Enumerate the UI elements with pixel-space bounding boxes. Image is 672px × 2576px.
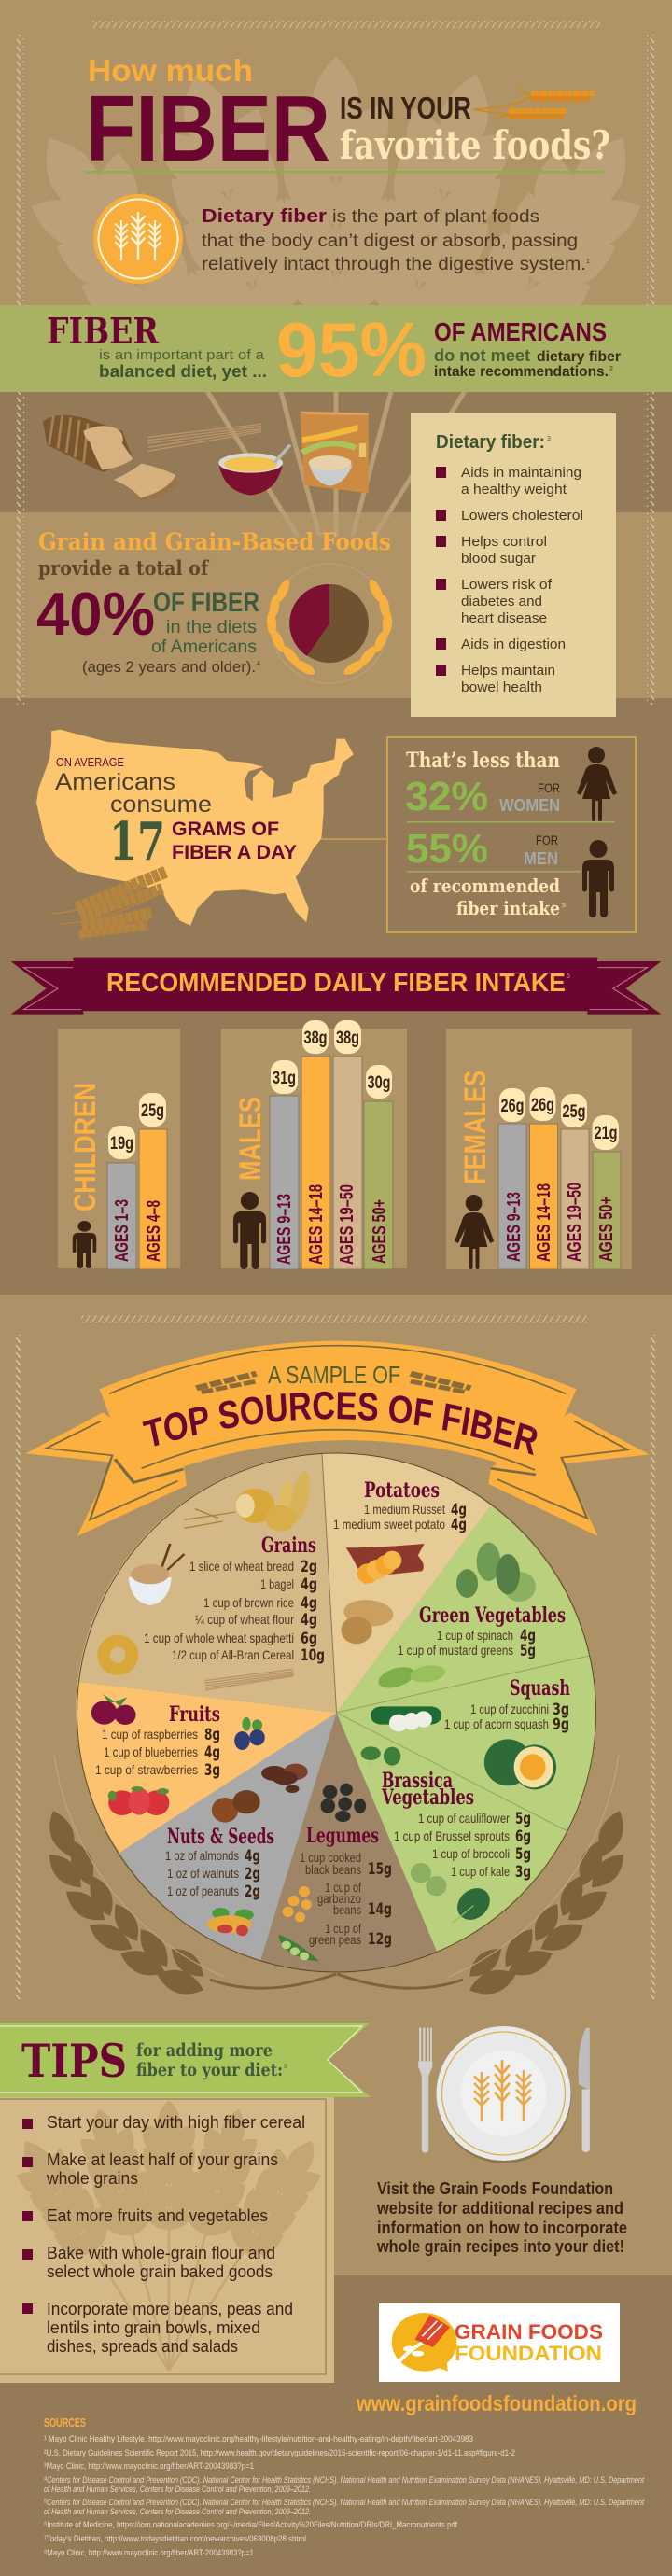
chart: females bbox=[446, 1029, 632, 1269]
icon: plate bbox=[437, 2026, 571, 2163]
icon: brussels sprouts bbox=[411, 1863, 446, 1896]
bar: ages 4-8: 25g bbox=[141, 1101, 164, 1121]
banner: a sample of top sources of fiber: 7 bbox=[531, 1428, 535, 1435]
tips text: Incorporate more beans, peas and bbox=[47, 2300, 293, 2318]
green vegetables text: Green Vegetables bbox=[419, 1603, 566, 1628]
banner text: top sources of fiber: TOP SOURCES OF FIBER bbox=[142, 1391, 538, 1456]
slice: potatoes: 1 medium sweet potato bbox=[333, 1517, 445, 1532]
icon: acorn squash bbox=[484, 1739, 556, 1789]
potatoes text: Potatoes bbox=[364, 1478, 440, 1503]
heading: tips: TIPS bbox=[21, 2034, 127, 2088]
icon: zucchini bbox=[371, 1706, 441, 1731]
flag: tips heading: fiber to your diet: bbox=[136, 2060, 283, 2080]
band text: balanced diet: balanced diet, yet ... bbox=[99, 362, 267, 381]
sources list: of Health and Human Services, Centers for Disease Control and Prevention, 2009–2012. bbox=[44, 2485, 311, 2495]
bar: ages 19-50: AGES 19–50 bbox=[565, 1183, 585, 1262]
slice: legumes: 1 cup cooked bbox=[300, 1850, 361, 1865]
icon: kale bbox=[452, 1885, 496, 1924]
bar: ages 1-3: 19g bbox=[110, 1134, 133, 1154]
stat: 17 grams: 17 bbox=[109, 811, 165, 873]
icon: black beans bbox=[320, 1784, 366, 1822]
title line: how much: How much bbox=[88, 53, 253, 88]
icon: peanuts bbox=[207, 1908, 254, 1936]
icon: leafy greens bbox=[456, 1543, 536, 1602]
icon: man bbox=[582, 840, 614, 917]
side decoration: sources section bbox=[14, 1315, 658, 1999]
ribbon: recommended daily fiber intake bbox=[10, 958, 662, 1015]
bar: ages 50+: AGES 50+ bbox=[370, 1199, 390, 1264]
slice: grains: 4g bbox=[301, 1611, 317, 1630]
panel: less than recommended: WOMEN bbox=[499, 795, 560, 815]
slice: legumes: black beans bbox=[305, 1862, 361, 1877]
slice: nuts and seeds: 1 oz of peanuts bbox=[167, 1883, 239, 1898]
map text: ON AVERAGE bbox=[56, 755, 124, 769]
background wheat watermark bbox=[0, 56, 672, 634]
title line: favorite foods: favorite foods? bbox=[340, 122, 610, 168]
band heading: fiber: FIBER bbox=[47, 310, 159, 352]
flag: tips heading bbox=[0, 2023, 371, 2097]
slice: potatoes: 4g bbox=[451, 1516, 467, 1534]
slice: fruits: 8g bbox=[204, 1726, 220, 1744]
slice: squash: 9g bbox=[553, 1715, 569, 1734]
benefit bullets bbox=[436, 467, 446, 676]
icon: chickpeas bbox=[283, 1886, 312, 1922]
band heading: of americans: OF AMERICANS bbox=[434, 317, 607, 346]
slice: grains: 1 cup of whole wheat spaghetti bbox=[144, 1631, 294, 1645]
text block: grain foods 40 percent: (ages 2 years and older). bbox=[82, 658, 256, 676]
brassica text: Brassica bbox=[382, 1769, 453, 1793]
slice: grains: 1 bagel bbox=[260, 1576, 294, 1591]
slice: squash: 3g bbox=[553, 1701, 569, 1719]
slice: fruits: 4g bbox=[204, 1743, 220, 1762]
icon: woman bbox=[577, 747, 617, 821]
legumes text: Legumes bbox=[306, 1824, 379, 1848]
sources list: ⁸Mayo Clinic, http://www.mayoclinic.org/fiber/ART-20043983?p=1 bbox=[44, 2548, 254, 2558]
text block: dietary fiber definition: is the part of plant foods bbox=[332, 207, 539, 227]
slice: brassica vegetables: 1 cup of Brussel sprouts bbox=[394, 1828, 510, 1843]
tips text: Make at least half of your grains bbox=[47, 2150, 278, 2169]
slice: grains: 2g bbox=[301, 1558, 317, 1576]
illustration: plate and cutlery bbox=[418, 2026, 590, 2163]
pie outline bbox=[77, 1453, 595, 1972]
bar: ages 50+ bbox=[364, 1065, 393, 1269]
slice: green vegetables: 4g bbox=[520, 1627, 536, 1645]
bar: ages 9-13: 31g bbox=[273, 1069, 296, 1088]
logo mark bbox=[392, 2313, 457, 2372]
benefit list text: Lowers risk of bbox=[461, 577, 553, 593]
heading: grain foods: Grain and Grain-Based Foods bbox=[38, 528, 391, 555]
icon: wheat badge bbox=[93, 194, 183, 284]
connector line bbox=[321, 838, 387, 840]
slice: grains: 4g bbox=[301, 1594, 317, 1613]
bar: ages 4-8 bbox=[139, 1093, 167, 1269]
panel: 95 percent band: intake recommendations. bbox=[434, 364, 609, 380]
bar: ages 14-18 bbox=[301, 1020, 330, 1269]
bar: ages 9-13: 26g bbox=[500, 1097, 525, 1116]
panel: less than recommended: MEN bbox=[524, 848, 558, 868]
sources list: ¹ Mayo Clinic Healthy Lifestyle. http://www.mayoclinic.org/healthy-lifestyle/nutrition-and-healthy-eating/in-depth/fiber/art-20043983 bbox=[44, 2434, 473, 2444]
ribbon: recommended daily fiber intake: 6 bbox=[567, 973, 570, 980]
slice: legumes: 15g bbox=[368, 1860, 392, 1879]
logo: grain foods foundation: FOUNDATION bbox=[455, 2342, 602, 2365]
slice: green vegetables bbox=[336, 1505, 595, 1952]
bar: ages 14-18 bbox=[530, 1087, 558, 1269]
slice: brassica vegetables: 1 cup of cauliflower bbox=[418, 1811, 510, 1826]
chart: 40 percent pie with wreath bbox=[266, 564, 393, 683]
slice: grains: 1/2 cup of All-Bran Cereal bbox=[172, 1647, 294, 1662]
sources list: ³Mayo Clinic, http://www.mayoclinic.org/fiber/ART-20043983?p=1 bbox=[44, 2461, 254, 2471]
tips text: whole grains bbox=[46, 2169, 138, 2188]
food illustrations: bread pasta cereal bbox=[43, 412, 369, 501]
label: males: MALES bbox=[233, 1097, 267, 1181]
slice: grains: 10g bbox=[301, 1646, 325, 1665]
slice: legumes: 1 cup of bbox=[325, 1921, 361, 1936]
slice: potatoes bbox=[322, 1453, 491, 1713]
tips text: Eat more fruits and vegetables bbox=[47, 2206, 268, 2225]
slice: grains: 6g bbox=[301, 1630, 317, 1648]
stat: 95 percent: 95% bbox=[276, 306, 427, 393]
slice: legumes bbox=[260, 1713, 437, 1972]
slice: nuts and seeds: 1 oz of almonds bbox=[165, 1848, 239, 1863]
bar: ages 4-8: AGES 4–8 bbox=[144, 1200, 164, 1262]
chart: top sources pie bbox=[76, 1453, 596, 1972]
stat: 40 percent: 40% bbox=[36, 580, 155, 648]
grains text: Grains bbox=[261, 1533, 316, 1558]
chart: children bbox=[58, 1029, 180, 1269]
icon: bowl bbox=[218, 445, 290, 496]
slice: fruits: 3g bbox=[204, 1761, 220, 1780]
bar: ages 19-50: 38g bbox=[336, 1029, 359, 1048]
slice: squash: 1 cup of zucchini bbox=[470, 1701, 549, 1716]
bar: ages 14-18: AGES 14–18 bbox=[534, 1183, 554, 1262]
slice: legumes: garbanzo bbox=[317, 1891, 361, 1906]
icon: raspberries bbox=[91, 1694, 136, 1725]
wheat wreath behind plate chart bbox=[42, 1755, 631, 2001]
label: children: CHILDREN bbox=[68, 1083, 102, 1211]
label: of fiber: OF FIBER bbox=[153, 587, 259, 618]
stat: men: 55% bbox=[406, 826, 488, 872]
icon: wheat bundle bbox=[51, 872, 166, 936]
icon: man bbox=[233, 1192, 266, 1269]
tips text: select whole grain baked goods bbox=[47, 2262, 273, 2281]
benefit list text: a healthy weight bbox=[461, 482, 567, 497]
text block: dietary fiber definition: that the body can’t digest or absorb, passing bbox=[202, 231, 578, 251]
slice: nuts and seeds: 2g bbox=[245, 1883, 260, 1901]
bar: ages 19-50: 25g bbox=[562, 1102, 586, 1122]
bar: ages 14-18: 26g bbox=[531, 1096, 554, 1115]
icon: bread loaf bbox=[43, 415, 176, 501]
slice: grains: ¼ cup of wheat flour bbox=[195, 1612, 294, 1627]
slice: brassica vegetables: 3g bbox=[515, 1863, 531, 1882]
panel: less than recommended: fiber intake bbox=[456, 897, 560, 919]
band text: important part: is an important part of a bbox=[99, 347, 265, 363]
tips text bbox=[46, 2113, 305, 2356]
bar: ages 19-50: AGES 19–50 bbox=[337, 1184, 357, 1265]
map: united states with consumption stat: FIBER A DAY bbox=[172, 842, 297, 863]
benefits heading: Dietary fiber: bbox=[436, 432, 545, 453]
bar: ages 50+: AGES 50+ bbox=[596, 1197, 617, 1262]
sources list bbox=[44, 2434, 644, 2558]
icon: knife bbox=[579, 2028, 590, 2152]
tip bullets bbox=[22, 2119, 33, 2314]
icon: title wheat bbox=[473, 87, 595, 119]
slice: nuts and seeds: 4g bbox=[245, 1847, 260, 1866]
icon: strawberries bbox=[108, 1786, 169, 1815]
band text: do not meet: do not meet bbox=[434, 346, 530, 365]
panel watermark wheat bbox=[0, 2100, 342, 2389]
text block: grain foods 40 percent: of Americans bbox=[151, 637, 257, 657]
sources heading: SOURCES bbox=[44, 2415, 86, 2429]
sources bbox=[44, 2415, 644, 2558]
text block: visit foundation: Visit the Grain Foods Foundation bbox=[377, 2179, 613, 2198]
bar: ages 50+: 30g bbox=[368, 1073, 390, 1093]
panel: 95 percent band bbox=[0, 305, 672, 393]
flag: tips heading: 8 bbox=[284, 2064, 287, 2070]
slice: legumes: 14g bbox=[368, 1900, 392, 1919]
sources list: ²U.S. Dietary Guidelines Scientific Report 2015, http://www.health.gov/dietaryguidelines/2015-scientific-report/06-chapter-1/d1-11.asp#figure-d1-2 bbox=[44, 2448, 515, 2458]
panel footer text: of recommended bbox=[410, 875, 560, 897]
bar: ages 9-13 bbox=[498, 1088, 526, 1269]
chart: males bbox=[221, 1020, 407, 1269]
icon: pecans bbox=[261, 1764, 308, 1793]
tips text: dishes, spreads and salads bbox=[47, 2337, 238, 2356]
text block: dietary fiber definition: relatively intact through the digestive system. bbox=[202, 255, 586, 274]
text block: dietary fiber definition: 1 bbox=[586, 259, 590, 265]
panel: dietary fiber benefits: 3 bbox=[547, 436, 551, 442]
benefit list text: diabetes and bbox=[461, 594, 542, 609]
text block: grain foods 40 percent: in the diets bbox=[166, 618, 257, 637]
sources list: of Health and Human Services, Centers for Disease Control and Prevention, 2009–2012. bbox=[44, 2507, 311, 2517]
benefit list text: blood sugar bbox=[461, 551, 536, 567]
sources list: ⁶Institute of Medicine, https://iom.nationalacademies.org/~/media/Files/Activity%20Files/Nutrition/DRIs/DRI_Macronutrients.pdf bbox=[44, 2520, 457, 2530]
panel: less than recommended: 5 bbox=[562, 903, 566, 909]
slice: brassica vegetables: 1 cup of kale bbox=[451, 1864, 510, 1879]
benefit list text: Helps control bbox=[461, 534, 547, 550]
map: united states with consumption stat: Americans bbox=[55, 769, 175, 795]
map: united states with consumption stat bbox=[36, 730, 354, 936]
benefit list text: Lowers cholesterol bbox=[461, 508, 583, 524]
panel: less than recommended: FOR bbox=[538, 780, 560, 795]
slice: grains: 4g bbox=[301, 1575, 317, 1594]
slice: brassica vegetables bbox=[336, 1713, 567, 1924]
slice: green vegetables: 1 cup of mustard greens bbox=[398, 1643, 513, 1658]
slice: brassica vegetables: 1 cup of broccoli bbox=[432, 1846, 510, 1861]
text block: grain foods 40 percent bbox=[36, 528, 391, 676]
slice: grains: 1 slice of wheat bread bbox=[189, 1559, 294, 1574]
bar: ages 14-18: AGES 14–18 bbox=[306, 1184, 327, 1265]
icon: pea pod bbox=[278, 1935, 319, 1962]
icon: lettuce leaves bbox=[373, 1662, 448, 1692]
bar: ages 9-13 bbox=[270, 1060, 299, 1269]
tips text: Start your day with high fiber cereal bbox=[47, 2113, 305, 2132]
slice: squash bbox=[336, 1655, 594, 1789]
slice: nuts and seeds bbox=[119, 1713, 336, 1961]
logo: grain foods foundation bbox=[379, 2303, 620, 2382]
icon: child bbox=[73, 1221, 96, 1268]
slice: brassica vegetables: Vegetables bbox=[381, 1785, 474, 1810]
tips text: lentils into grain bowls, mixed bbox=[47, 2318, 260, 2337]
icon: bread bbox=[184, 1470, 314, 1532]
benefit list text: Aids in digestion bbox=[461, 637, 566, 652]
slice: nuts and seeds: 1 oz of walnuts bbox=[167, 1866, 239, 1881]
bar: ages 14-18: 38g bbox=[304, 1029, 327, 1048]
bar: ages 19-50 bbox=[561, 1094, 589, 1269]
banner text: a sample of: A SAMPLE OF bbox=[268, 1361, 400, 1389]
benefit list text bbox=[461, 465, 583, 695]
slice: nuts and seeds: 2g bbox=[245, 1865, 260, 1883]
website url: www.grainfoodsfoundation.org bbox=[356, 2391, 637, 2415]
slice: legumes: 12g bbox=[368, 1930, 392, 1949]
slice: potatoes: 1 medium Russet bbox=[364, 1502, 445, 1517]
stat: women: 32% bbox=[405, 774, 488, 819]
title line: is in your: IS IN YOUR bbox=[340, 91, 471, 125]
slice: legumes: green peas bbox=[309, 1932, 361, 1947]
tips text: Bake with whole-grain flour and bbox=[47, 2244, 275, 2262]
icon: banner wheat right bbox=[411, 1374, 470, 1393]
nuts text: Nuts & Seeds bbox=[167, 1825, 274, 1849]
slice: fruits: 1 cup of raspberries bbox=[102, 1727, 198, 1742]
icon: spaghetti bbox=[204, 1669, 294, 1690]
map: united states with consumption stat: consume bbox=[110, 791, 212, 818]
slice: fruits: 1 cup of strawberries bbox=[95, 1762, 198, 1777]
slice: brassica vegetables: 5g bbox=[515, 1845, 531, 1864]
benefit list text: bowel health bbox=[461, 679, 542, 695]
icon: rice bowl bbox=[129, 1544, 184, 1605]
panel: 95 percent band: 2 bbox=[609, 366, 613, 372]
label: females: FEMALES bbox=[458, 1071, 492, 1184]
panel: less than recommended: FOR bbox=[536, 833, 558, 847]
logo wordmark: GRAIN FOODS bbox=[455, 2320, 603, 2344]
text block: dietary fiber definition bbox=[202, 206, 590, 274]
squash text: Squash bbox=[510, 1676, 570, 1701]
fruits text: Fruits bbox=[169, 1702, 220, 1727]
bar: ages 50+: 21g bbox=[594, 1124, 618, 1143]
slice: brassica vegetables: 6g bbox=[515, 1827, 531, 1846]
slice: green vegetables: 5g bbox=[520, 1642, 536, 1660]
panel: tips list bbox=[0, 2099, 342, 2389]
benefit list text: heart disease bbox=[461, 610, 547, 626]
panel: dietary fiber benefits bbox=[411, 413, 616, 717]
bar: ages 1-3: AGES 1–3 bbox=[112, 1199, 133, 1262]
icon: blueberries bbox=[234, 1717, 265, 1750]
slice: fruits: 1 cup of blueberries bbox=[104, 1744, 198, 1759]
sources list: ⁷Today’s Dietitian, http://www.todaysdietitian.com/newarchives/063008p28.shtml bbox=[44, 2534, 306, 2544]
icon: spaghetti bbox=[147, 424, 261, 451]
map: united states with consumption stat: GRAMS OF bbox=[172, 819, 279, 840]
bar: ages 50+ bbox=[592, 1115, 621, 1269]
bar: ages 9-13: AGES 9–13 bbox=[274, 1194, 295, 1265]
benefit list text: Aids in maintaining bbox=[461, 465, 581, 481]
bar: ages 1-3 bbox=[107, 1126, 136, 1269]
slice: grains bbox=[77, 1453, 336, 1713]
icon: broccoli bbox=[361, 1746, 400, 1767]
bar: ages 19-50 bbox=[333, 1020, 362, 1269]
icon: potato bbox=[341, 1597, 396, 1644]
slice: fruits bbox=[76, 1682, 336, 1853]
icon: cereal box bbox=[300, 412, 369, 493]
benefit list text: Helps maintain bbox=[461, 663, 555, 679]
icon: walnuts bbox=[212, 1790, 260, 1823]
text block: visit foundation: information on how to incorporate bbox=[377, 2219, 627, 2237]
text block: visit foundation bbox=[376, 2179, 627, 2256]
slice: green vegetables: 1 cup of spinach bbox=[437, 1628, 513, 1643]
ribbon: recommended daily fiber intake: RECOMMENDED DAILY FIBER INTAKE bbox=[106, 968, 566, 997]
banner: a sample of top sources of fiber bbox=[26, 1340, 650, 1536]
text block: dietary fiber definition: Dietary fiber bbox=[202, 206, 327, 227]
slice: grains: 1 cup of brown rice bbox=[203, 1595, 294, 1610]
side decoration: top section bbox=[17, 21, 654, 705]
bar: ages 9-13: AGES 9–13 bbox=[504, 1192, 525, 1262]
text block: visit foundation: website for additional recipes and bbox=[376, 2199, 623, 2218]
slice: potatoes: 4g bbox=[451, 1501, 467, 1519]
panel: 95 percent band: dietary fiber bbox=[537, 349, 621, 365]
icon: bagel bbox=[97, 1635, 138, 1675]
tips section background bbox=[0, 2097, 334, 2383]
map shape bbox=[36, 730, 354, 926]
slice: legumes: beans bbox=[333, 1902, 361, 1917]
text block: visit foundation: whole grain recipes into your diet! bbox=[376, 2237, 624, 2256]
slice: brassica vegetables: 5g bbox=[515, 1810, 531, 1828]
slice: legumes: 1 cup of bbox=[325, 1880, 361, 1895]
title word: fiber: FIBER bbox=[86, 77, 330, 181]
icon: fork bbox=[418, 2028, 432, 2153]
text block: grain foods 40 percent: 4 bbox=[257, 661, 260, 667]
panel: less than recommended bbox=[387, 737, 636, 932]
icon: sweet potato bbox=[346, 1544, 425, 1584]
icon: woman bbox=[455, 1195, 494, 1269]
slice: squash: 1 cup of acorn squash bbox=[444, 1716, 549, 1731]
icon: banner wheat left bbox=[196, 1374, 257, 1393]
subheading: provide a total: provide a total of bbox=[38, 556, 210, 580]
panel heading: That’s less than bbox=[406, 749, 560, 773]
title bbox=[86, 53, 610, 181]
subheading: adding more fiber: for adding more bbox=[136, 2040, 273, 2061]
